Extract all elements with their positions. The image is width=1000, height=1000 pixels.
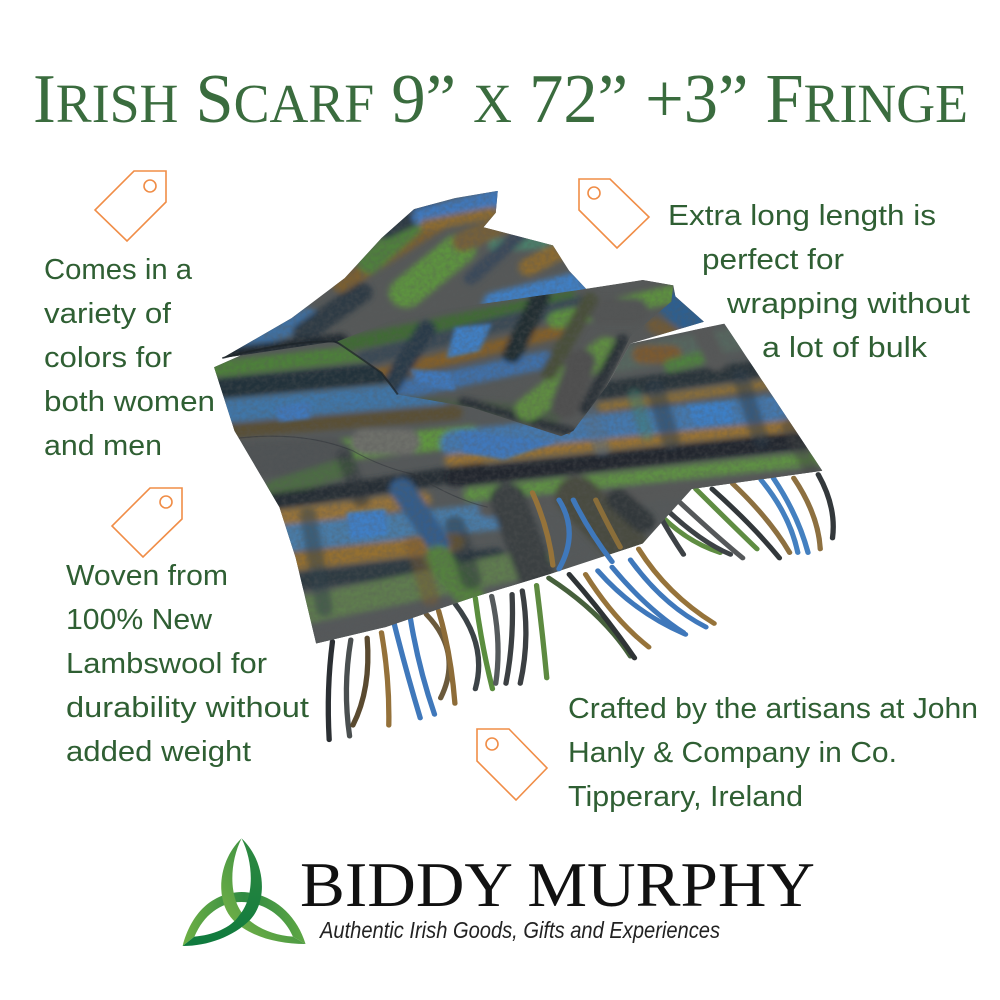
text: length xyxy=(668,200,970,364)
scarf lower body xyxy=(214,324,822,644)
icon: tag mid left xyxy=(112,488,182,557)
title: IRISH SCARF 9” X 72” +3” FRINGE xyxy=(33,61,968,138)
text: colors: and men xyxy=(44,430,162,462)
fringe: right xyxy=(647,474,833,558)
text: crafted xyxy=(568,693,978,813)
text: woven: Woven from xyxy=(66,560,228,592)
text: colors: variety of xyxy=(44,298,172,330)
fringe: lower left xyxy=(328,585,547,740)
text: length: Extra long length is xyxy=(668,200,936,232)
logo: wordmark: Authentic Irish Goods, Gifts and Experiences xyxy=(318,917,720,943)
text: woven xyxy=(66,560,309,768)
text: colors xyxy=(44,254,215,462)
icon: tag top left xyxy=(95,171,166,241)
text: crafted: Tipperary, Ireland xyxy=(568,781,803,813)
logo: wordmark: BIDDY MURPHY xyxy=(300,849,815,920)
scarf photo illustration xyxy=(202,180,850,740)
text: woven: 100% New xyxy=(66,604,213,636)
text: length: a lot of bulk xyxy=(762,332,928,364)
text: woven: Lambswool for xyxy=(66,648,267,680)
icon: tag top right xyxy=(579,179,649,248)
cross weave checks xyxy=(308,376,810,609)
scarf top shoulder xyxy=(222,190,704,434)
text: crafted: Crafted by the artisans at John xyxy=(568,693,978,725)
text: woven: durability without xyxy=(66,692,309,724)
fringe: middle xyxy=(549,549,714,658)
logo: trinity knot xyxy=(183,838,306,946)
text: length: perfect for xyxy=(702,244,844,276)
icon: tag bottom right xyxy=(477,729,547,800)
text: colors: both women xyxy=(44,386,215,418)
fringe: over the scarf xyxy=(532,493,620,569)
text: colors: Comes in a xyxy=(44,254,193,286)
text: length: wrapping without xyxy=(726,288,970,320)
text: woven: added weight xyxy=(66,736,251,768)
scarf folded flap xyxy=(332,275,679,442)
text: crafted: Hanly & Company in Co. xyxy=(568,737,897,769)
text: colors: colors for xyxy=(44,342,172,374)
fold edge shadow xyxy=(222,342,398,394)
